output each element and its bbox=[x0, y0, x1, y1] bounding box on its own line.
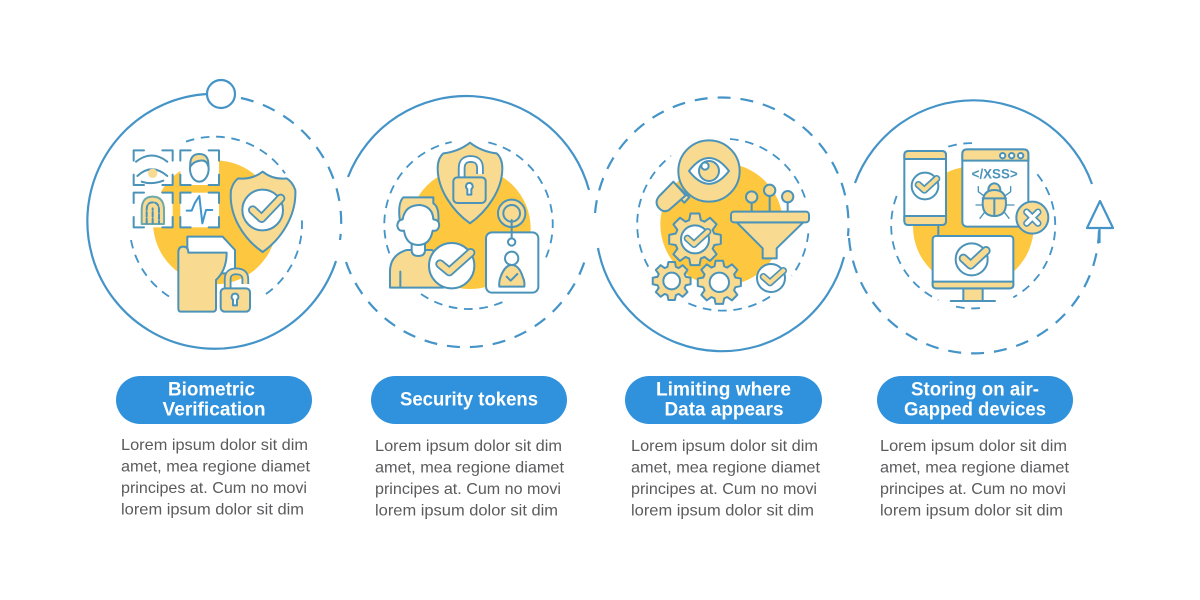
code label: </XSS> bbox=[972, 165, 1018, 181]
step 3 body text: Lorem ipsum dolor sit dim bbox=[631, 438, 818, 455]
step 2 body text: Lorem ipsum dolor sit dim bbox=[375, 438, 562, 455]
icon: person bbox=[390, 197, 443, 288]
timeline ring: step 3 bbox=[595, 97, 849, 351]
step 4 body text: Lorem ipsum dolor sit dim bbox=[880, 438, 1067, 455]
icon: desktop monitor with check bbox=[933, 236, 1013, 301]
icon: gear with check bbox=[669, 214, 721, 265]
icon: funnel bbox=[731, 185, 809, 292]
step 1 body text bbox=[121, 437, 311, 518]
step 3 heading pill: Limiting where bbox=[656, 380, 791, 400]
timeline ring: step 2 bbox=[346, 96, 589, 347]
step 1 heading pill bbox=[116, 376, 312, 424]
step 4 body text: lorem ipsum dolor sit dim bbox=[880, 502, 1063, 520]
step 2 heading pill bbox=[371, 376, 567, 424]
step 2 body text: lorem ipsum dolor sit dim bbox=[375, 502, 558, 520]
icon: blocked mark bbox=[1016, 202, 1048, 234]
step 3 body text: amet, mea regione diamet bbox=[631, 460, 821, 476]
icon: face scan bbox=[180, 150, 219, 185]
step 1 body text: principes at. Cum no movi bbox=[121, 480, 307, 497]
icon: check badge bbox=[429, 243, 474, 288]
icon: shield with check bbox=[231, 172, 295, 252]
icon: connector bbox=[935, 225, 941, 237]
step 4 heading pill: Gapped devices bbox=[904, 400, 1046, 420]
step 2 body text: principes at. Cum no movi bbox=[375, 481, 561, 498]
arrow head bbox=[1087, 201, 1113, 243]
timeline ring: step 1 bbox=[87, 80, 341, 349]
timeline ring: step 4 bbox=[849, 100, 1099, 353]
step 3 heading pill: Data appears bbox=[664, 400, 784, 420]
icon: ID token bbox=[486, 200, 538, 293]
step 3 body text bbox=[631, 438, 821, 520]
step 3 heading pill bbox=[625, 376, 822, 424]
icon: browser window with bug bbox=[962, 149, 1028, 227]
icon: small gear left bbox=[653, 262, 691, 300]
step 1 body text: amet, mea regione diamet bbox=[121, 458, 311, 476]
step 1 heading pill: Biometric bbox=[168, 380, 255, 400]
step 2 body text bbox=[375, 438, 565, 520]
icon: magnifier with eye bbox=[657, 140, 740, 211]
icon: small gear right bbox=[698, 261, 741, 304]
icon: eye scan bbox=[134, 150, 173, 185]
icon: fingerprint scan bbox=[134, 193, 173, 227]
icon group: security tokens bbox=[384, 142, 553, 309]
icon: locked folder bbox=[178, 237, 250, 312]
step 2 body text: amet, mea regione diamet bbox=[375, 460, 565, 476]
step 3 body text: lorem ipsum dolor sit dim bbox=[631, 502, 814, 520]
icon: pulse scan bbox=[180, 193, 219, 227]
step 4 heading pill: Storing on air- bbox=[911, 380, 1039, 400]
icon group: limiting where data appears bbox=[637, 139, 809, 311]
icon group: biometric verification bbox=[131, 137, 302, 312]
step 1 heading pill: Verification bbox=[162, 400, 266, 420]
step 4 heading pill bbox=[877, 376, 1073, 424]
step 2 heading pill: Security tokens bbox=[400, 390, 538, 410]
step 4 body text: amet, mea regione diamet bbox=[880, 460, 1070, 476]
step 4 body text bbox=[880, 438, 1070, 520]
step 4 body text: principes at. Cum no movi bbox=[880, 481, 1066, 498]
step 1 body text: lorem ipsum dolor sit dim bbox=[121, 502, 304, 518]
icon group: storing on air-gapped devices bbox=[891, 143, 1055, 308]
step 1 body text: Lorem ipsum dolor sit dim bbox=[121, 437, 308, 454]
icon: shield with open lock bbox=[438, 143, 502, 223]
icon: smartphone with check bbox=[904, 151, 946, 225]
step 3 body text: principes at. Cum no movi bbox=[631, 481, 817, 498]
